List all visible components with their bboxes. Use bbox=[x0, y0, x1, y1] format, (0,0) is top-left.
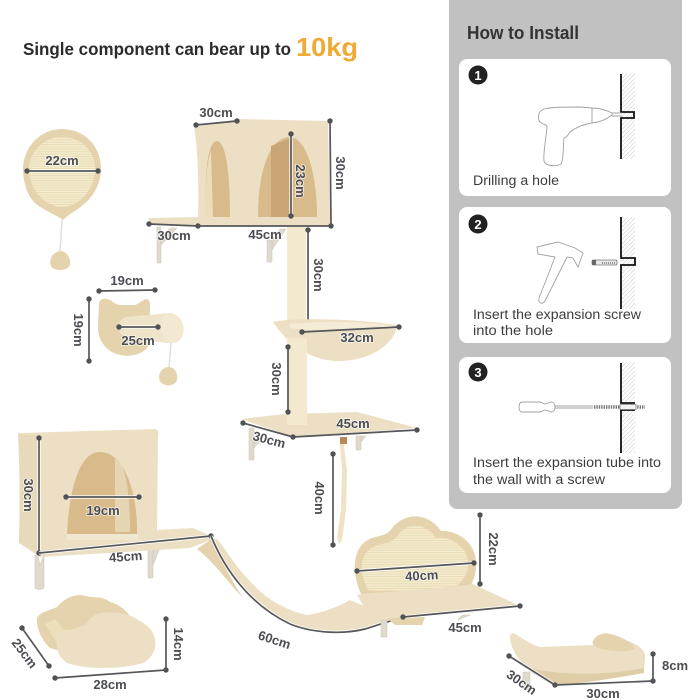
dimension: 30cm house height bbox=[327, 118, 348, 229]
card: step 1 drilling bbox=[459, 59, 671, 196]
dimension: 45cm platform width bbox=[290, 416, 420, 440]
card: step 3 screwing: the wall with a screw bbox=[473, 472, 605, 487]
card: step 1 drilling: 1 bbox=[474, 68, 482, 83]
dimension: 19cm arch width: 19cm bbox=[86, 503, 120, 518]
card: step 2 hammering: Insert the expansion screw bbox=[473, 307, 641, 322]
dimension: 30cm platform depth bbox=[240, 420, 293, 451]
card: step 2 hammering: into the hole bbox=[473, 323, 553, 338]
dimension: 8cm height: 8cm bbox=[662, 658, 688, 673]
dimension: 30cm top depth bbox=[193, 105, 240, 128]
dimension: 23cm arch height bbox=[288, 131, 308, 219]
card: step 3 screwing: Insert the expansion tube into bbox=[473, 455, 661, 470]
dimension: 30cm upper post: 30cm bbox=[311, 258, 326, 292]
upper house with shelf bbox=[146, 105, 348, 325]
dimension: 45cm shelf width bbox=[39, 533, 214, 565]
dimension: 40cm rope bbox=[312, 451, 336, 548]
dimension: 60cm ramp curve: 60cm bbox=[256, 627, 293, 652]
dimension: 45cm shelf width: 45cm bbox=[109, 548, 143, 565]
title: 10kg bbox=[296, 32, 358, 62]
dimension: 30cm house height bbox=[21, 435, 42, 556]
dimension: 22cm cloud height: 22cm bbox=[486, 532, 501, 566]
dimension: 40cm cloud width: 40cm bbox=[405, 567, 439, 584]
scratching disk with ball bbox=[23, 129, 101, 270]
lower house with ramp bbox=[18, 429, 403, 652]
dimension: 22cm bbox=[24, 153, 101, 174]
dimension: 19cm width: 19cm bbox=[110, 273, 144, 288]
cloud scratching board and platform bbox=[354, 512, 523, 637]
title: Single component can bear up to bbox=[23, 39, 291, 59]
dimension: 8cm height bbox=[650, 651, 688, 681]
dimension: 28cm width: 28cm bbox=[93, 677, 127, 692]
dimension: 23cm arch height: 23cm bbox=[293, 164, 308, 198]
dimension: 25cm depth: 25cm bbox=[9, 636, 41, 671]
icon: screw and tube bbox=[594, 404, 645, 410]
cat-head wall perch with ball bbox=[71, 273, 186, 385]
dimension: 25cm depth bbox=[9, 625, 52, 671]
dimension: 30cm shelf depth: 30cm bbox=[157, 228, 191, 243]
card: step 1 drilling: Drilling a hole bbox=[473, 173, 559, 188]
dimension: 40cm cloud width bbox=[354, 560, 477, 584]
dimension: 45cm shelf width: 45cm bbox=[248, 227, 282, 242]
dimension: 22cm: 22cm bbox=[45, 153, 79, 168]
dimension: 19cm height: 19cm bbox=[71, 313, 86, 347]
cushion bed bbox=[504, 633, 688, 700]
dimension: 30cm upper post bbox=[305, 227, 326, 325]
dimension: 32cm hammock bbox=[299, 324, 402, 345]
dimension: 14cm height: 14cm bbox=[171, 627, 186, 661]
dimension: 40cm rope: 40cm bbox=[312, 481, 327, 515]
dimension: 30cm top depth: 30cm bbox=[199, 105, 233, 120]
dimension: 30cm lower post: 30cm bbox=[269, 362, 284, 396]
dimension: 30cm platform depth: 30cm bbox=[251, 428, 287, 451]
dimension: 30cm width bbox=[555, 678, 656, 700]
dimension: 30cm depth: 30cm bbox=[504, 667, 540, 698]
card: step 2 hammering bbox=[459, 207, 671, 343]
dimension: 30cm depth bbox=[504, 653, 558, 698]
dimension: 45cm platform width: 45cm bbox=[448, 620, 482, 635]
dimension: 14cm height bbox=[163, 616, 186, 670]
icon: expansion screw bbox=[592, 260, 617, 265]
dimension: 28cm width bbox=[52, 667, 169, 692]
dimension: 45cm platform width: 45cm bbox=[336, 416, 370, 431]
dimension: 45cm platform width bbox=[400, 603, 523, 635]
card: step 2 hammering: 2 bbox=[474, 217, 482, 232]
panel: how to install bbox=[449, 0, 682, 509]
dimension: 30cm house height: 30cm bbox=[333, 156, 348, 190]
title bbox=[23, 32, 358, 62]
card: step 3 screwing bbox=[459, 357, 671, 493]
dimension: 30cm shelf depth bbox=[146, 221, 201, 243]
dimension: 60cm ramp curve bbox=[211, 536, 403, 652]
card: step 3 screwing: 3 bbox=[474, 365, 482, 380]
hammock and lower platform bbox=[240, 319, 420, 548]
dimension: 30cm lower post bbox=[269, 344, 291, 415]
dimension: 25cm roll: 25cm bbox=[121, 333, 155, 348]
heading: how to install: How to Install bbox=[467, 23, 579, 43]
dimension: 19cm arch width bbox=[63, 494, 142, 518]
dimension: 32cm hammock: 32cm bbox=[340, 330, 374, 345]
dimension: 22cm cloud height bbox=[477, 512, 501, 587]
dimension: 45cm shelf width bbox=[198, 226, 331, 242]
paw-shaped bed bbox=[9, 595, 186, 692]
dimension: 30cm house height: 30cm bbox=[21, 478, 36, 512]
